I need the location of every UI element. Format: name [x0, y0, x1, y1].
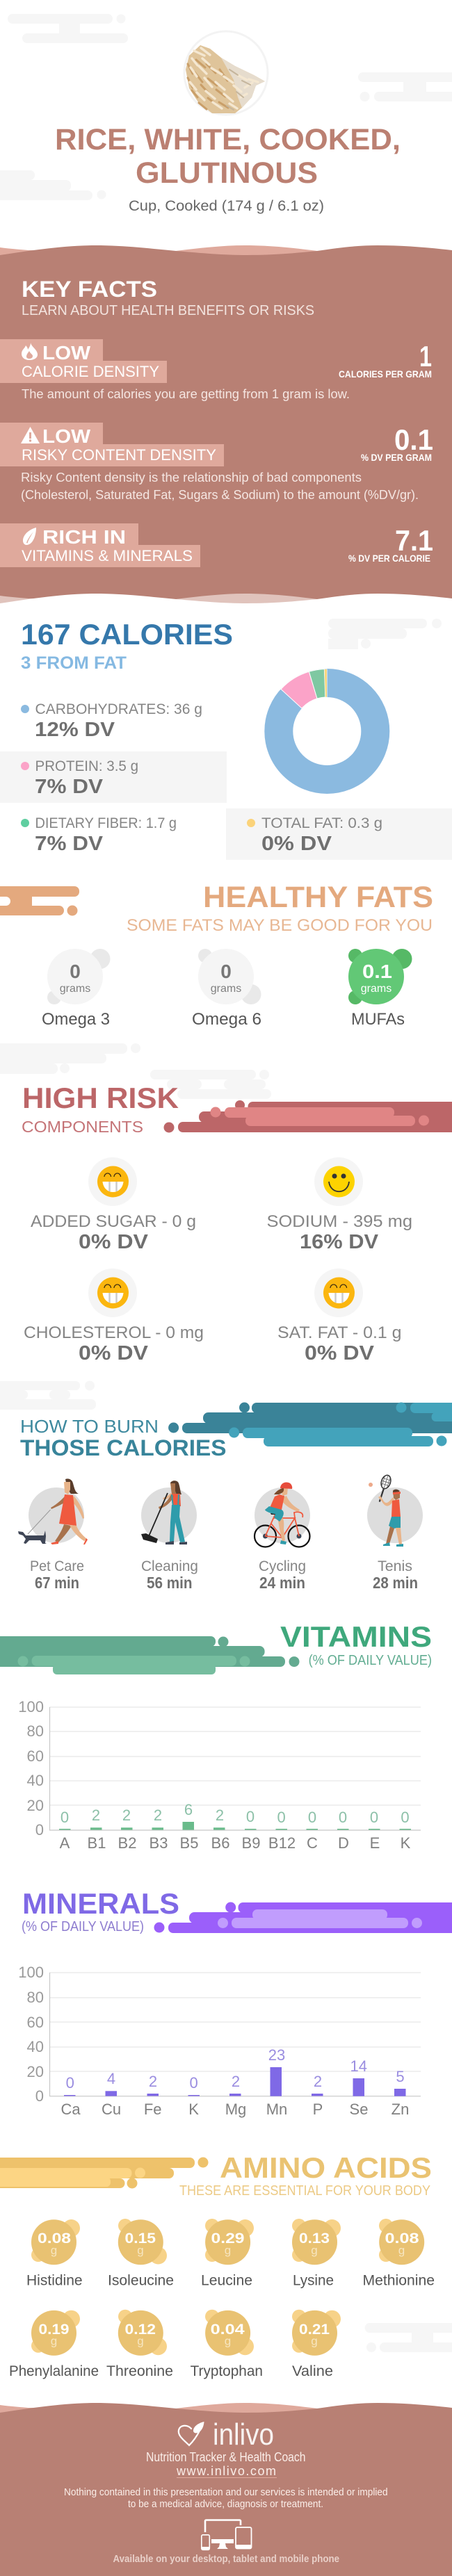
- activity: tennis: Tenis: [378, 1558, 412, 1574]
- amino acid: valine: 0.21: [299, 2322, 330, 2338]
- fat: omega 3: Omega 3: [42, 1010, 110, 1029]
- bar chart: minerals: Ca: [61, 2101, 81, 2118]
- key facts heading: [22, 277, 314, 318]
- fact: low risky content density: [0, 423, 433, 502]
- food image: rice in circle: [184, 0, 268, 115]
- section: minerals header: MINERALS: [22, 1887, 179, 1920]
- fat: omega 6: grams: [211, 983, 241, 995]
- bar chart: vitamins: K: [401, 1834, 411, 1852]
- logo: inlivo: inlivo: [213, 2418, 274, 2452]
- amino acid: methionine: g: [398, 2244, 405, 2257]
- risk: sodium: 16% DV: [300, 1231, 379, 1253]
- amino acid: histidine: g: [51, 2244, 57, 2257]
- fat: omega 6: 0: [220, 961, 232, 982]
- fact: low risky content density: (Cholesterol, Saturated Fat, Sugars & Sodium) to the amount (%DV/gr).: [21, 488, 419, 502]
- bar chart: vitamins: 0: [370, 1809, 378, 1826]
- risk: saturated fat: [277, 1269, 402, 1364]
- website link: www.inlivo.com: [176, 2464, 276, 2478]
- risk: cholesterol: [24, 1269, 204, 1364]
- fact: low risky content density: Risky Content density is the relationship of bad components: [21, 471, 362, 484]
- amino acid: methionine: [363, 2219, 435, 2288]
- fact: low risky content density: RISKY CONTENT DENSITY: [22, 446, 216, 464]
- activity: pet care: 67 min: [35, 1574, 79, 1592]
- section: high risk header: [22, 1082, 452, 1136]
- icon: woman walking dog: [18, 1478, 88, 1544]
- bar chart: minerals: 4: [107, 2070, 115, 2087]
- icon: woman sweeping: [141, 1481, 187, 1544]
- legend: dietary fiber: 7% DV: [35, 833, 104, 855]
- amino acid: isoleucine: [108, 2219, 174, 2288]
- bar chart: minerals: Cu: [102, 2101, 121, 2118]
- bar chart: vitamins: C: [307, 1834, 318, 1852]
- amino acid: tryptophan: Tryptophan: [191, 2363, 263, 2379]
- bar chart: vitamins: 80: [27, 1722, 44, 1740]
- bar chart: vitamins: 2: [92, 1807, 100, 1824]
- legend: total fat: TOTAL FAT: 0.3 g: [261, 815, 382, 831]
- bar chart: vitamins: B5: [180, 1834, 198, 1852]
- section: minerals header: [22, 1887, 452, 1934]
- risk: cholesterol: CHOLESTEROL - 0 mg: [24, 1323, 204, 1342]
- bar chart: minerals: P: [313, 2101, 323, 2118]
- fat: omega 3: 0: [70, 961, 81, 982]
- section: minerals header: (% OF DAILY VALUE): [22, 1919, 144, 1934]
- amino acid: threonine: [106, 2310, 173, 2379]
- bar chart: minerals: 40: [27, 2038, 44, 2055]
- bar chart: minerals: 23: [268, 2046, 285, 2064]
- legend: protein: PROTEIN: 3.5 g: [35, 758, 138, 774]
- heading: calories: 3 FROM FAT: [21, 653, 127, 673]
- bar chart: vitamins: B9: [242, 1834, 260, 1852]
- fact: low risky content density: LOW: [42, 425, 91, 447]
- bar chart: vitamins: 40: [27, 1772, 44, 1789]
- key facts heading: KEY FACTS: [22, 277, 157, 302]
- bar chart: minerals: Zn: [392, 2101, 409, 2118]
- key facts heading: LEARN ABOUT HEALTH BENEFITS OR RISKS: [22, 303, 314, 318]
- activity: cycling: Cycling: [259, 1558, 306, 1574]
- fat: MUFAs: [348, 949, 412, 1029]
- bar chart: minerals: 20: [27, 2063, 44, 2080]
- bar chart: minerals: 0: [35, 2087, 44, 2105]
- icon: flame: [22, 343, 38, 360]
- amino acid: threonine: 0.12: [125, 2322, 156, 2338]
- bar chart: minerals: 14: [350, 2057, 367, 2075]
- fat: MUFAs: 0.1: [362, 961, 392, 982]
- amino acid: valine: g: [311, 2335, 318, 2348]
- fat: omega 3: grams: [60, 983, 90, 995]
- amino acid: leucine: 0.29: [211, 2231, 245, 2247]
- section: amino acids header: AMINO ACIDS: [220, 2151, 432, 2184]
- fact: low risky content density: 0.1: [394, 423, 433, 456]
- activity: cleaning: 56 min: [147, 1574, 192, 1592]
- amino acid: valine: Valine: [292, 2363, 333, 2379]
- amino acid: tryptophan: g: [225, 2335, 231, 2348]
- bar chart: minerals: 60: [27, 2014, 44, 2031]
- bar chart: vitamins: B2: [118, 1834, 136, 1852]
- amino acid: phenylalanine: [9, 2310, 99, 2379]
- disclaimer: [64, 2486, 388, 2510]
- bar chart: vitamins: B6: [211, 1834, 229, 1852]
- icon: warning triangle: [21, 427, 40, 443]
- risk: saturated fat: 0% DV: [305, 1342, 375, 1364]
- section: amino acids header: THESE ARE ESSENTIAL FOR YOUR BODY: [179, 2183, 430, 2199]
- title: GLUTINOUS: [136, 156, 318, 190]
- legend: dietary fiber: DIETARY FIBER: 1.7 g: [35, 815, 177, 831]
- icon: leaf: [23, 528, 36, 545]
- amino acid: leucine: [201, 2219, 254, 2288]
- bar chart: vitamins: D: [338, 1834, 349, 1852]
- legend: protein: [0, 751, 227, 803]
- fact: low calorie density: The amount of calories you are getting from 1 gram is low.: [22, 387, 350, 401]
- bar chart: minerals: K: [188, 2101, 199, 2118]
- section: vitamins header: (% OF DAILY VALUE): [309, 1653, 432, 1668]
- bar chart: vitamins: 0: [308, 1809, 316, 1826]
- amino acid: isoleucine: 0.15: [125, 2231, 156, 2247]
- decoration: red bars: [164, 1100, 452, 1133]
- fat: MUFAs: grams: [361, 983, 392, 995]
- bar chart: minerals: 2: [149, 2073, 157, 2090]
- bar chart: minerals: 80: [27, 1989, 44, 2006]
- fact: low calorie density: 1: [419, 340, 432, 373]
- activity: cycling: 24 min: [259, 1574, 305, 1592]
- legend: carbohydrates: 12% DV: [35, 719, 115, 741]
- fact: rich in vitamins and minerals: % DV PER CALORIE: [348, 553, 430, 564]
- section: how to burn header: THOSE CALORIES: [20, 1435, 227, 1460]
- decoration: teal bars: [168, 1403, 452, 1446]
- legend: carbohydrates: CARBOHYDRATES: 36 g: [35, 701, 202, 717]
- amino acid: tryptophan: [191, 2310, 263, 2379]
- amino acid: histidine: 0.08: [38, 2231, 71, 2247]
- bar chart: vitamins: B3: [150, 1834, 168, 1852]
- amino acid: phenylalanine: 0.19: [39, 2322, 70, 2338]
- icon: smiling face: [323, 1166, 355, 1197]
- bar chart: vitamins: A: [60, 1834, 70, 1852]
- activity: pet care: [18, 1478, 88, 1592]
- fact: low calorie density: [0, 339, 432, 401]
- bar chart: vitamins: 0: [246, 1808, 255, 1825]
- decoration: yellow bars: [0, 2158, 209, 2188]
- fact: rich in vitamins and minerals: 7.1: [395, 524, 433, 557]
- bar chart: vitamins: 0: [339, 1809, 347, 1826]
- amino acid: phenylalanine: Phenylalanine: [9, 2363, 99, 2379]
- bar chart: minerals: Fe: [144, 2101, 162, 2118]
- section: amino acids header: [0, 2151, 432, 2199]
- amino acid: lysine: [292, 2219, 341, 2288]
- bar chart: minerals: 2: [314, 2073, 322, 2090]
- amino acid: lysine: g: [311, 2244, 318, 2257]
- bar chart: minerals: [18, 1964, 421, 2118]
- fat: omega 3: [42, 949, 110, 1029]
- fat: omega 6: Omega 6: [192, 1010, 261, 1029]
- bar chart: vitamins: 2: [122, 1807, 131, 1824]
- bar chart: vitamins: 0: [401, 1809, 410, 1826]
- fat: omega 6: [192, 949, 261, 1029]
- amino acid: isoleucine: Isoleucine: [108, 2273, 174, 2288]
- bar chart: minerals: Mg: [225, 2101, 246, 2118]
- amino acid: phenylalanine: g: [51, 2335, 57, 2348]
- bar chart: vitamins: 0: [277, 1809, 286, 1826]
- amino acid: methionine: 0.08: [385, 2231, 419, 2247]
- disclaimer: to be a medical advice, diagnosis or treatment.: [128, 2498, 323, 2510]
- fat: MUFAs: MUFAs: [351, 1010, 405, 1029]
- availability note: Available on your desktop, tablet and mobile phone: [113, 2553, 339, 2565]
- section: high risk header: COMPONENTS: [22, 1118, 143, 1136]
- bar chart: vitamins: 0: [35, 1821, 44, 1839]
- title: [55, 123, 401, 190]
- activity: tennis: [367, 1474, 423, 1592]
- icon: cyclist: [255, 1482, 310, 1547]
- fact: rich in vitamins and minerals: RICH IN: [42, 526, 126, 548]
- bar chart: minerals: Se: [350, 2101, 368, 2118]
- bar chart: vitamins: 0: [60, 1809, 69, 1826]
- bar chart: minerals: 5: [396, 2068, 405, 2085]
- fact: rich in vitamins and minerals: [0, 523, 433, 567]
- tagline: Nutrition Tracker & Health Coach: [146, 2450, 306, 2464]
- fact: rich in vitamins and minerals: VITAMINS & MINERALS: [22, 547, 193, 564]
- heading: calories: 167 CALORIES: [21, 618, 233, 651]
- bar chart: vitamins: 2: [154, 1807, 162, 1824]
- amino acid: leucine: Leucine: [201, 2273, 252, 2288]
- amino acid: threonine: g: [137, 2335, 144, 2348]
- heading: calories: [21, 618, 233, 673]
- bar chart: vitamins: B12: [268, 1834, 296, 1852]
- activity: cleaning: [141, 1481, 198, 1592]
- bar chart: vitamins: 60: [27, 1747, 44, 1765]
- risk: sodium: SODIUM - 395 mg: [267, 1212, 412, 1231]
- bar chart: vitamins: 2: [216, 1807, 224, 1824]
- legend: carbohydrates: [21, 701, 202, 741]
- bar chart: vitamins: 20: [27, 1797, 44, 1814]
- legend: protein: 7% DV: [35, 776, 104, 798]
- legend: total fat: 0% DV: [261, 833, 332, 855]
- section: high risk header: HIGH RISK: [22, 1082, 179, 1114]
- macronutrient donut chart: [279, 669, 376, 780]
- fact: low risky content density: % DV PER GRAM: [361, 452, 432, 463]
- risk: sodium: [267, 1157, 412, 1253]
- activity: cleaning: Cleaning: [141, 1558, 198, 1574]
- risk: saturated fat: SAT. FAT - 0.1 g: [277, 1323, 402, 1342]
- legend: total fat: [226, 808, 452, 860]
- bar chart: minerals: Mn: [266, 2101, 287, 2118]
- activity: cycling: [255, 1482, 310, 1592]
- disclaimer: Nothing contained in this presentation and our services is intended or implied: [64, 2486, 388, 2498]
- section: vitamins header: VITAMINS: [280, 1620, 432, 1653]
- amino acid: isoleucine: g: [137, 2244, 144, 2257]
- icon: grinning face: [323, 1278, 355, 1308]
- icon: tennis player: [369, 1474, 403, 1547]
- bar chart: vitamins: 100: [18, 1698, 44, 1715]
- risk: added sugar: ADDED SUGAR - 0 g: [31, 1212, 196, 1231]
- amino acid: threonine: Threonine: [106, 2363, 173, 2379]
- bar chart: minerals: 2: [232, 2073, 240, 2090]
- serving size subtitle: Cup, Cooked (174 g / 6.1 oz): [129, 198, 324, 214]
- panel: key facts: [0, 245, 452, 616]
- section: healthy fats header: SOME FATS MAY BE GOOD FOR YOU: [127, 916, 433, 935]
- icon: grinning face: [97, 1278, 129, 1308]
- decoration: green bars: [0, 1636, 299, 1674]
- risk: added sugar: 0% DV: [79, 1231, 149, 1253]
- amino acid: leucine: g: [225, 2244, 231, 2257]
- section: healthy fats header: [0, 881, 433, 935]
- logo: inlivo: [179, 2418, 274, 2452]
- fact: low calorie density: CALORIE DENSITY: [22, 363, 159, 380]
- section: healthy fats header: HEALTHY FATS: [203, 881, 433, 914]
- bar chart: minerals: 0: [66, 2074, 74, 2092]
- icon: grinning face: [97, 1166, 129, 1197]
- bar chart: minerals: 100: [18, 1964, 44, 1981]
- bar chart: vitamins: E: [370, 1834, 380, 1852]
- risk: cholesterol: 0% DV: [79, 1342, 149, 1364]
- activity: pet care: Pet Care: [30, 1558, 84, 1574]
- amino acid: methionine: Methionine: [363, 2273, 435, 2288]
- amino acid: histidine: Histidine: [26, 2273, 83, 2288]
- amino acid: lysine: Lysine: [293, 2273, 334, 2288]
- section: vitamins header: [0, 1620, 432, 1674]
- section: how to burn header: HOW TO BURN: [20, 1416, 159, 1437]
- panel: footer: [0, 2403, 452, 2576]
- icon: devices: [202, 2520, 252, 2550]
- amino acid: lysine: 0.13: [299, 2231, 330, 2247]
- amino acid: valine: [292, 2310, 341, 2379]
- decoration: purple bars: [154, 1902, 452, 1933]
- section: how to burn header: [20, 1403, 452, 1460]
- activity: tennis: 28 min: [373, 1574, 418, 1592]
- fact: low calorie density: LOW: [42, 342, 91, 364]
- bar chart: vitamins: [18, 1698, 421, 1852]
- legend: dietary fiber: [21, 815, 177, 855]
- risk: added sugar: [31, 1157, 196, 1253]
- fact: low calorie density: CALORIES PER GRAM: [339, 368, 432, 380]
- decoration: orange bars: [0, 886, 79, 916]
- amino acid: histidine: [26, 2219, 83, 2288]
- bar chart: minerals: 0: [189, 2074, 198, 2092]
- bar chart: vitamins: 6: [184, 1801, 193, 1818]
- bar chart: vitamins: B1: [88, 1834, 106, 1852]
- amino acid: tryptophan: 0.04: [211, 2322, 245, 2338]
- title: RICE, WHITE, COOKED,: [55, 123, 401, 156]
